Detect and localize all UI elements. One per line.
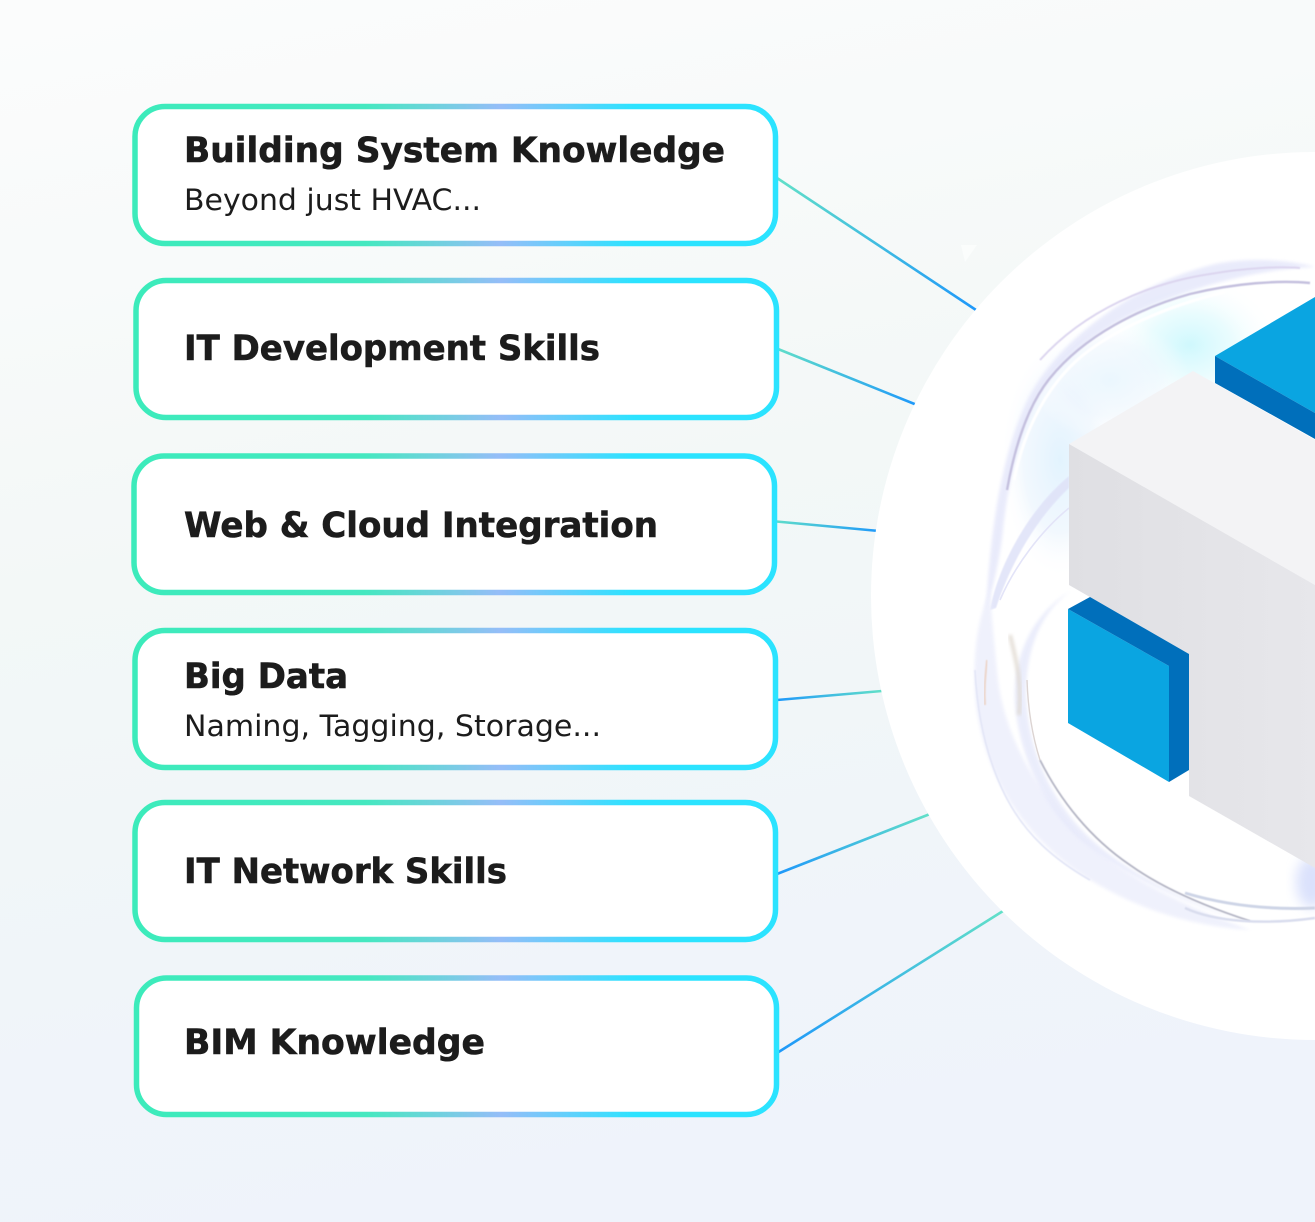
connector lines [771, 178, 1003, 1053]
connector: web and cloud integration [771, 521, 879, 531]
card: IT Network Skills [135, 802, 776, 940]
heading: Building System Knowledge: Building System Knowledge [184, 131, 725, 171]
heading: Web & Cloud Integration: Web & Cloud Integration [184, 506, 658, 546]
small faint triangle [961, 245, 977, 262]
subtext: Beyond just HVAC: Beyond just HVAC... [184, 183, 481, 217]
card: Big Data [135, 630, 776, 768]
small blue plate [1068, 597, 1189, 782]
illustration: glass ring and isometric blocks [974, 260, 1315, 930]
glass ring: glow inside [1000, 275, 1315, 908]
top blue plate [1215, 297, 1315, 439]
connector: building system knowledge [777, 178, 976, 310]
white circle backdrop [871, 152, 1315, 1040]
card: Building System Knowledge [135, 106, 776, 244]
connector: big data [777, 691, 882, 700]
white central block [1069, 371, 1315, 868]
connector: IT development skills [773, 347, 917, 405]
card: BIM Knowledge [136, 978, 776, 1114]
heading: IT Development Skills: IT Development Skills [184, 329, 600, 369]
card: IT Development Skills [136, 280, 776, 418]
heading: Big Data: Big Data [184, 657, 348, 697]
connector: BIM knowledge [777, 911, 1003, 1053]
connector: IT network skills [777, 814, 930, 874]
card: Web & Cloud Integration [134, 456, 774, 592]
glass ring: upper band [986, 260, 1315, 612]
glass ring: lower band [974, 590, 1315, 930]
subtext: Naming, Tagging, Storage: Naming, Tagging, Storage... [184, 709, 601, 743]
heading: BIM Knowledge: BIM Knowledge [184, 1023, 485, 1063]
heading: IT Network Skills: IT Network Skills [184, 852, 507, 892]
